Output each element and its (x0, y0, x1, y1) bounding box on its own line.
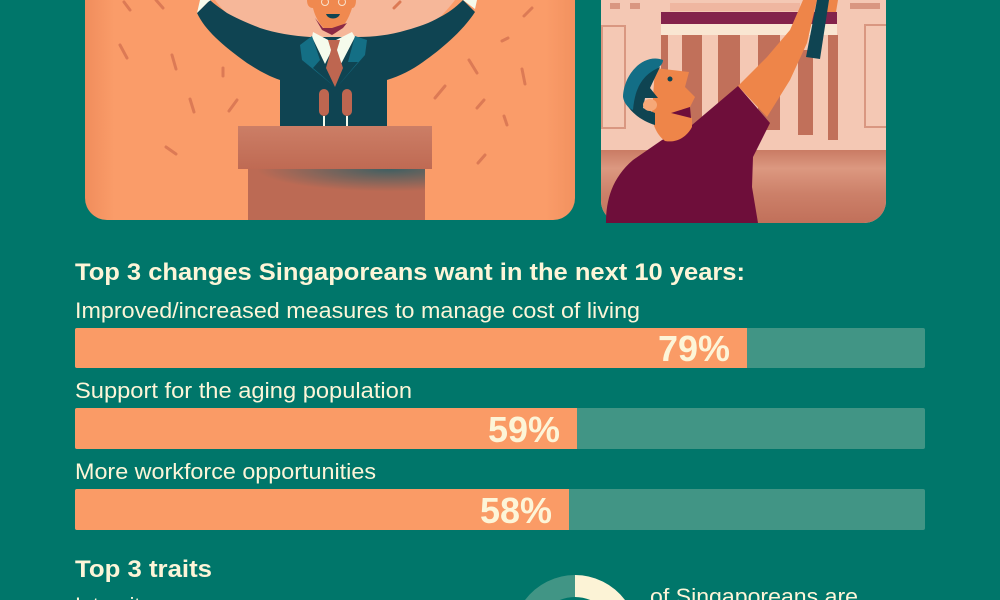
podium (238, 126, 432, 220)
man: arm (738, 0, 817, 117)
speaker: suit (197, 0, 475, 126)
bar fill (75, 489, 569, 530)
man: cap (623, 59, 663, 110)
confetti (120, 0, 532, 163)
spotlight behind speaker (185, 0, 485, 60)
speaker: cuffs (197, 0, 477, 13)
value: 79% (658, 328, 730, 369)
man: shirt (606, 86, 770, 223)
bar track (75, 489, 925, 530)
value: 58% (480, 490, 552, 531)
label: Improved/increased measures to manage cost of living (75, 298, 640, 323)
speaker: collar (312, 32, 355, 64)
illustration: man raising ballot at parliament (601, 0, 887, 223)
man: neck and face (652, 68, 695, 141)
panel background: orange card (85, 0, 575, 220)
microphones (319, 89, 352, 126)
value: 59% (488, 409, 560, 450)
illustration: speaker at podium (85, 0, 575, 220)
bar fill (75, 408, 577, 449)
speaker: tie (326, 40, 343, 87)
heading: top 3 traits: Top 3 traits (75, 556, 212, 583)
bar track (75, 408, 925, 449)
label: More workforce opportunities (75, 459, 376, 484)
building background (601, 0, 887, 223)
speaker: glasses (322, 0, 346, 6)
speaker: beard (315, 18, 347, 35)
man: ballot (806, 0, 829, 59)
man: hand (825, 0, 838, 12)
speaker: head (307, 0, 356, 35)
bar row: aging population (75, 378, 925, 450)
heading: top 3 changes: Top 3 changes Singaporeans want in the next 10 years: (75, 259, 745, 286)
bar row: workforce opportunities (75, 459, 925, 531)
man: eye (668, 76, 672, 82)
label: Support for the aging population (75, 378, 412, 403)
bar fill (75, 328, 747, 368)
man: mouth (671, 107, 691, 118)
bar row: cost of living (75, 298, 925, 369)
man: hair (627, 67, 660, 125)
bar track (75, 328, 925, 368)
speaker: mouth (326, 14, 340, 18)
speaker: lapels (300, 36, 367, 87)
man: ear (643, 99, 657, 111)
donut chart (525, 575, 625, 600)
